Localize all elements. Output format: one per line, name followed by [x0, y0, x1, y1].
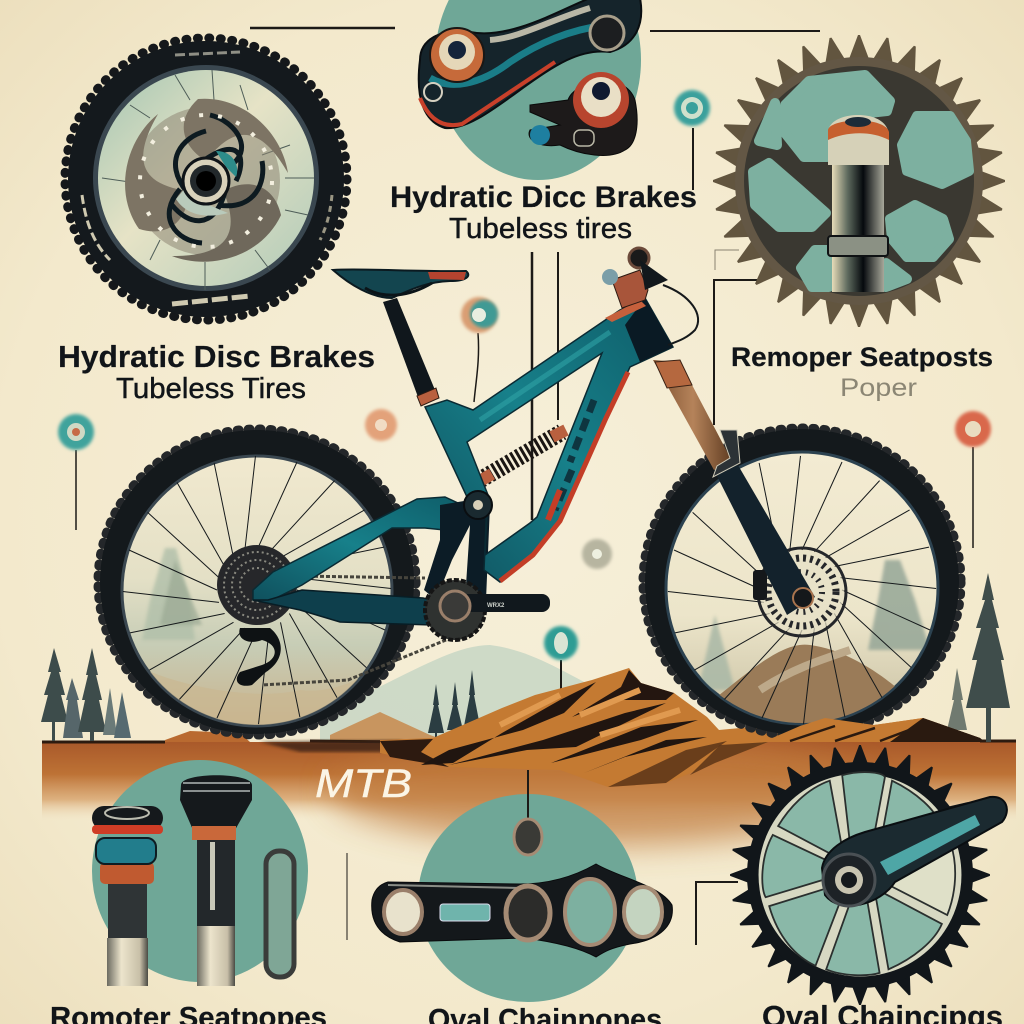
callout node: top teal: [674, 90, 710, 126]
low ridge under rear wheel: [165, 731, 250, 742]
callout node: orange: [365, 409, 397, 441]
chain stay: [253, 590, 432, 625]
seatpost part one: [92, 806, 163, 986]
label: left: Tubeless Tires: [116, 373, 306, 405]
stem: [612, 270, 648, 308]
crank arm: [822, 797, 1007, 906]
front tread: [643, 428, 961, 736]
seat collar: [417, 388, 439, 406]
hub: [183, 158, 229, 204]
ground and landscape: [41, 573, 1016, 845]
tan hill: [330, 712, 450, 742]
front brake rotor: [753, 548, 846, 636]
ground line: [42, 741, 1016, 742]
rear shock: [478, 430, 566, 482]
tire body: [68, 41, 344, 317]
label: right: Remoper Seatposts: [731, 342, 993, 372]
fork hub: [793, 588, 813, 608]
callout node: seat orange teal: [461, 297, 498, 333]
cassette: [217, 545, 297, 625]
head tube: [625, 298, 673, 362]
seat stay: [253, 497, 473, 602]
seatpost in chainring: [832, 165, 884, 240]
brake lever arm: [419, 0, 641, 128]
brake spiral end: [590, 16, 624, 50]
fork crown: [713, 430, 740, 477]
MTB label: MTB: [315, 762, 412, 806]
rear tread: [98, 429, 416, 735]
crank petals: [762, 772, 955, 975]
label: left: Hydratic Disc Brakes: [58, 339, 375, 374]
shadow under rear tire: [260, 740, 420, 752]
tire sidewall marks: [82, 52, 332, 304]
handlebar grip: [629, 248, 649, 268]
orange frame accent: [605, 300, 646, 322]
crankset: [425, 580, 550, 640]
trees middle: [428, 670, 480, 738]
fork lower: [714, 460, 815, 615]
top teal circle: [435, 0, 641, 180]
callout node: right orange: [955, 411, 991, 447]
caliper: [529, 81, 637, 155]
mountain bike: [217, 248, 815, 686]
rear tire: [100, 430, 414, 734]
label: top center: [390, 181, 697, 245]
front wheel: [638, 424, 966, 738]
front wheel interior: [666, 452, 938, 724]
callout node: left teal: [58, 414, 94, 450]
rocker link: [424, 500, 490, 600]
center bottom teal circle: [418, 794, 638, 1002]
wheel detail: disc brake and tubeless tire: [65, 38, 347, 320]
tree right: [947, 573, 1010, 742]
spokes: [102, 70, 314, 290]
rear wheel interior: [122, 456, 392, 726]
rear spokes: [42, 419, 421, 790]
wheel interior: [93, 65, 319, 291]
seatpost: [383, 298, 435, 397]
rear wheel scenery: [142, 546, 358, 725]
main pivot: [464, 491, 492, 519]
callout node: gray: [582, 539, 612, 569]
fork seal: [655, 360, 692, 388]
chain: [262, 576, 446, 685]
seatpost part two: [180, 775, 252, 986]
main frame: [425, 298, 673, 582]
label: left: [58, 339, 375, 405]
chainring link plate: [372, 819, 672, 957]
front tire: [645, 429, 959, 735]
label: top center: Tubeless tires: [449, 213, 632, 245]
crankset: WRX2: [487, 603, 505, 609]
brake rotor: [94, 99, 288, 293]
red down tube edge: [500, 372, 628, 581]
rear derailleur: [237, 628, 281, 686]
connector lines: [76, 28, 973, 945]
chainring with seatpost, top right: [691, 13, 1024, 349]
saddle: [333, 269, 468, 298]
chainring with crank, bottom right: [711, 726, 1009, 1024]
left bottom teal circle: [92, 760, 308, 982]
bike top-tube highlight: [480, 332, 610, 420]
fork upper: [653, 360, 733, 470]
front spokes: [587, 419, 966, 790]
rear wheel: [94, 424, 420, 740]
label: right: Poper: [840, 374, 917, 402]
brake piston: [430, 28, 484, 82]
small bushing: [514, 819, 542, 855]
top brake parts: [419, 0, 641, 155]
tire tread: [65, 38, 347, 320]
chainring windows: [753, 75, 969, 287]
label: right: [731, 342, 993, 402]
foreground rocks over front tire: [763, 718, 985, 742]
callout node: lower teal: [544, 626, 578, 660]
rock ridge: [380, 668, 985, 787]
brake cable: [663, 285, 698, 345]
small lever part: [266, 851, 294, 977]
trees left: [41, 648, 131, 741]
label: top center: Hydratic Dicc Brakes: [390, 181, 697, 214]
front wheel scenery: [698, 560, 930, 730]
distant hills: [320, 645, 620, 742]
